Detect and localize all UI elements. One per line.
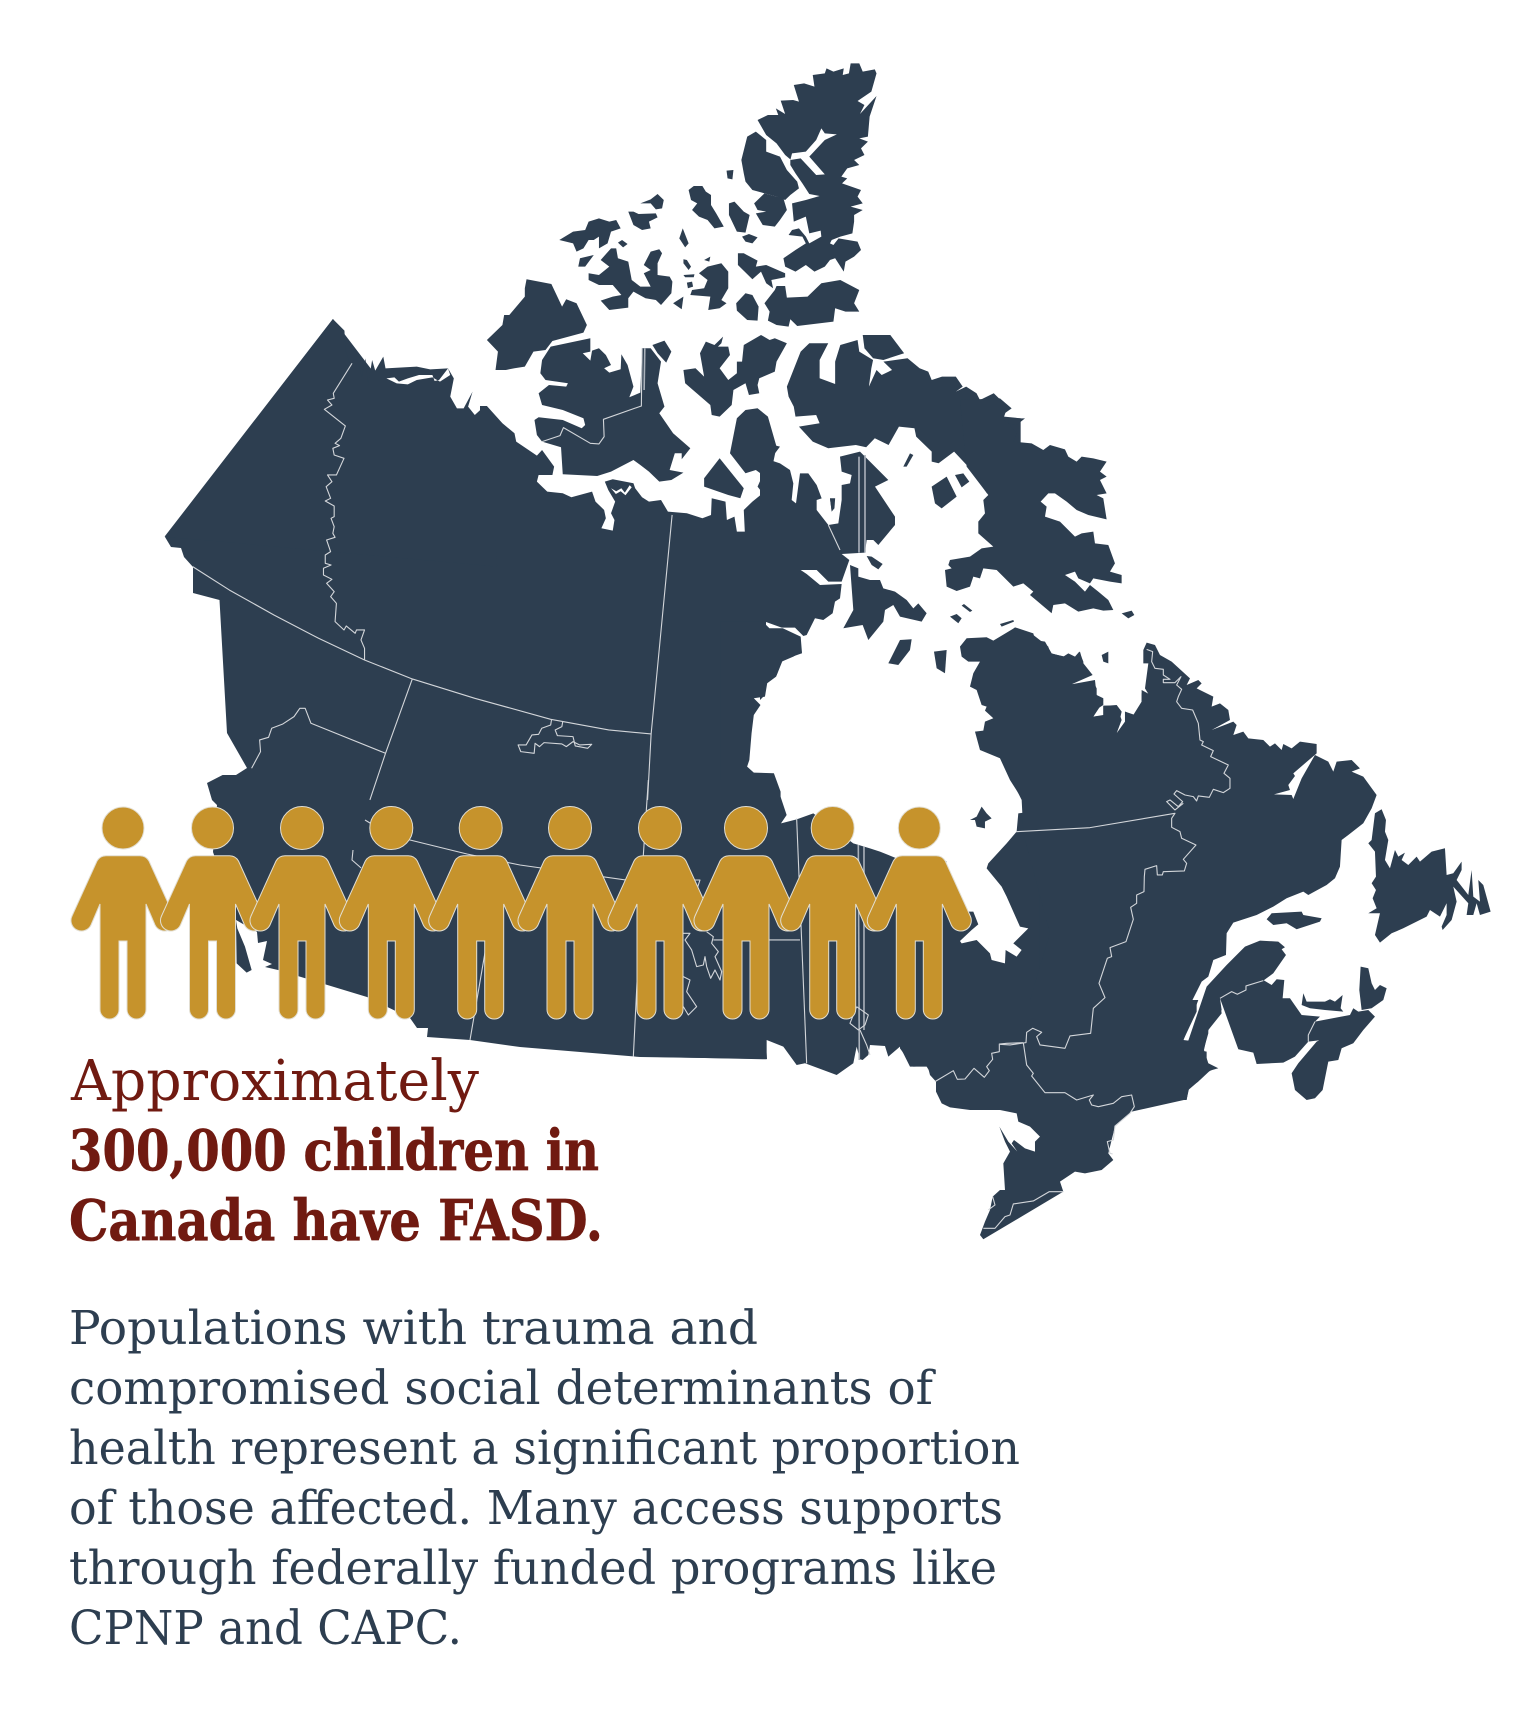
heading: Approximately <box>70 1049 479 1114</box>
body paragraph: Populations with trauma and <box>69 1301 758 1356</box>
Arctic coast and archipelago <box>480 63 1021 540</box>
Vancouver Island <box>236 920 252 973</box>
person 6 <box>518 806 622 1019</box>
person 3 <box>250 806 354 1019</box>
heading <box>69 1049 603 1254</box>
provincial and territorial borders <box>193 348 1315 1228</box>
Prince Edward Island <box>1302 993 1343 1012</box>
Newfoundland <box>1368 809 1491 943</box>
southern Ontario <box>900 1000 1222 1239</box>
Ungava <box>960 628 1160 780</box>
person 4 <box>339 806 443 1019</box>
body paragraph: health represent a significant proportion <box>69 1421 1020 1476</box>
person 2 <box>160 807 265 1019</box>
Quebec, Labrador and Atlantic provinces <box>1000 611 1491 1100</box>
map of Canada <box>165 63 1491 1239</box>
row of ten people icons <box>71 806 971 1019</box>
body paragraph: compromised social determinants of <box>69 1361 937 1416</box>
person 5 <box>429 806 533 1019</box>
body paragraph: of those affected. Many access supports <box>69 1481 1003 1536</box>
Nova Scotia <box>1292 1008 1375 1100</box>
Queen Elizabeth Islands <box>559 218 621 252</box>
body paragraph <box>69 1301 1020 1656</box>
body paragraph: through federally funded programs like <box>69 1541 997 1596</box>
Axel Heiberg Island <box>741 132 799 200</box>
body paragraph: CPNP and CAPC. <box>69 1601 462 1656</box>
central mainland infill <box>740 536 766 625</box>
Baffin Island north <box>787 340 1021 507</box>
heading: 300,000 children in <box>69 1118 599 1184</box>
heading: Canada have FASD. <box>69 1188 603 1254</box>
New Brunswick <box>1220 979 1320 1064</box>
person 8 <box>694 806 798 1019</box>
Victoria Island <box>534 338 690 482</box>
Cape Breton Island <box>1359 967 1387 1010</box>
Southampton Island <box>843 565 927 640</box>
person 7 <box>608 806 712 1019</box>
western and southern mainland <box>165 319 767 1059</box>
Anticosti Island <box>1267 912 1322 929</box>
northwest coast <box>165 319 802 800</box>
Bylot Island <box>863 335 904 360</box>
Somerset and Prince of Wales islands <box>683 335 787 417</box>
Melville Peninsula and Keewatin <box>760 413 895 700</box>
person 1 <box>71 807 175 1019</box>
Ellesmere Island <box>758 63 877 272</box>
Banks Island <box>487 279 587 370</box>
person 9 <box>781 806 885 1019</box>
James Bay east infill <box>1035 840 1060 1000</box>
person 10 <box>867 807 971 1019</box>
Baffin south, Keewatin and Foxe Basin islands <box>760 398 1160 780</box>
Belcher Islands <box>970 807 992 828</box>
Hudson Bay south coast and prairies <box>640 780 1040 1080</box>
